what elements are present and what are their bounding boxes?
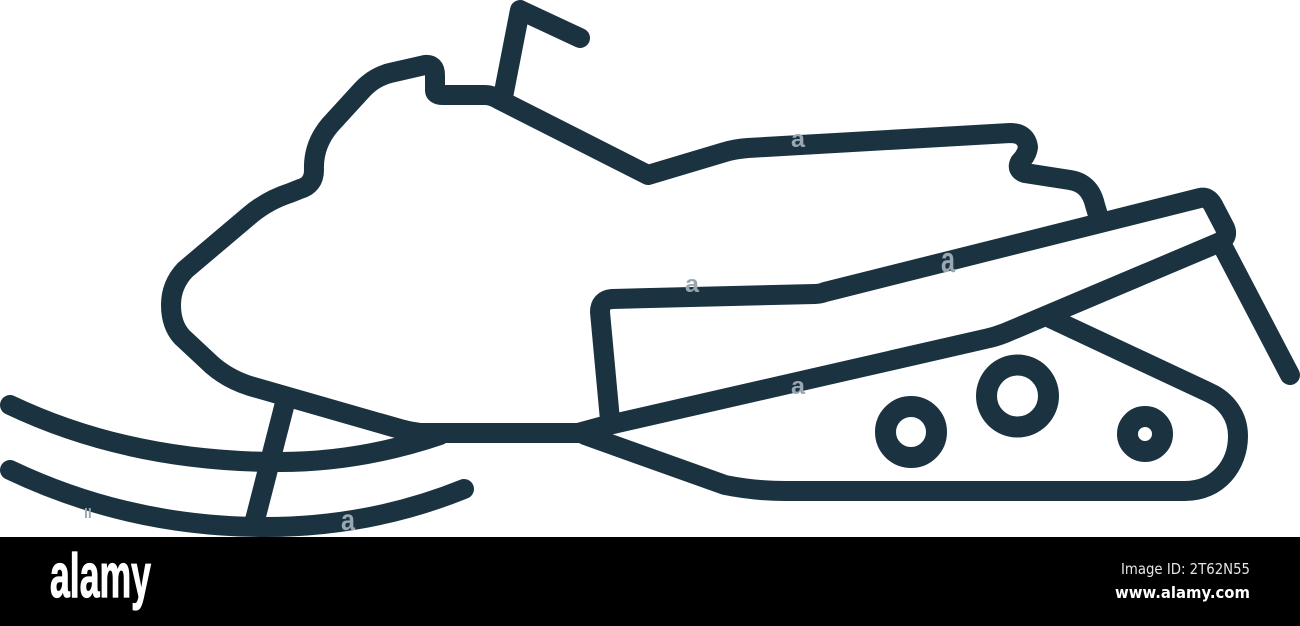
- watermark fragments: a: [685, 271, 700, 298]
- footer band: [0, 537, 1300, 626]
- handlebar: [503, 10, 580, 97]
- track wheel middle: [986, 365, 1048, 427]
- ski upper line: [10, 405, 440, 462]
- watermark fragments: a: [791, 373, 806, 400]
- rear flap: [1222, 245, 1290, 375]
- watermark fragments: a: [341, 504, 355, 537]
- logo: alamy: alamy: [50, 542, 151, 611]
- track wheel right: [1128, 416, 1162, 452]
- watermark fragments: a: [791, 126, 806, 153]
- image id: Image ID: 2T62N55: [1121, 560, 1250, 578]
- website url: www.alamy.com: [1115, 583, 1250, 602]
- watermark fragments: a: [941, 239, 956, 280]
- track belt: [585, 318, 1238, 491]
- ski strut: [255, 403, 285, 520]
- track wheel left: [886, 406, 936, 458]
- watermark fragments: ll: [84, 505, 92, 521]
- watermark fragments: [84, 126, 956, 537]
- snowmobile body outline: [171, 65, 1098, 433]
- ski lower line: [10, 470, 464, 527]
- seat and tunnel: [578, 198, 1226, 433]
